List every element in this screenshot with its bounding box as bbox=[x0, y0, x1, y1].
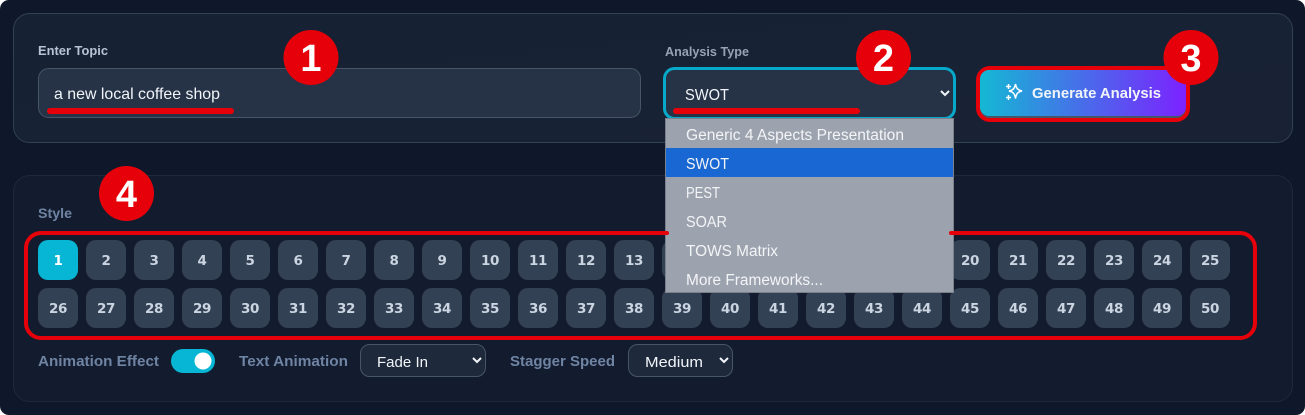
stagger speed select: Medium bbox=[645, 354, 703, 371]
row 2 of style buttons: 31 bbox=[289, 301, 307, 317]
option: generic: Generic 4 Aspects Presentation bbox=[686, 127, 904, 144]
row 2 of style buttons: 48 bbox=[1105, 301, 1123, 317]
row 2 of style buttons bbox=[38, 288, 1230, 328]
row 1 of style buttons: 10 bbox=[481, 253, 499, 269]
row 2 of style buttons: 30 bbox=[241, 301, 259, 317]
icon: sparkles bbox=[1006, 84, 1022, 100]
row 2 of style buttons: 27 bbox=[97, 301, 115, 317]
option: tows matrix: TOWS Matrix bbox=[686, 243, 778, 260]
label: style: Style bbox=[38, 205, 72, 221]
row 2 of style buttons: 34 bbox=[433, 301, 451, 317]
row 1 of style buttons: 5 bbox=[246, 253, 254, 269]
style number grid bbox=[38, 240, 1230, 328]
stagger speed select bbox=[628, 344, 732, 376]
row 1 of style buttons: 21 bbox=[1009, 253, 1027, 269]
badge 2 bbox=[856, 30, 911, 85]
row 2 of style buttons: 38 bbox=[625, 301, 643, 317]
row 1 of style buttons: 25 bbox=[1201, 253, 1219, 269]
analysis type select bbox=[664, 68, 954, 118]
dropdown list bbox=[666, 118, 954, 292]
row 2 of style buttons: 26 bbox=[49, 301, 67, 317]
badge 1 bbox=[284, 30, 338, 85]
row 2 of style buttons: 36 bbox=[529, 301, 547, 317]
row 1 of style buttons: 9 bbox=[438, 253, 446, 269]
row 2 of style buttons: 33 bbox=[385, 301, 403, 317]
option: soar: SOAR bbox=[686, 214, 727, 231]
option: more frameworks: More Frameworks... bbox=[686, 272, 823, 289]
toggle switch bbox=[171, 349, 215, 373]
option: swot: SWOT bbox=[686, 156, 729, 173]
row 2 of style buttons: 49 bbox=[1153, 301, 1171, 317]
row 2 of style buttons: 46 bbox=[1009, 301, 1027, 317]
row 2 of style buttons: 29 bbox=[193, 301, 211, 317]
row 1 of style buttons: 11 bbox=[529, 253, 547, 269]
label: stagger speed: Stagger Speed bbox=[510, 354, 615, 370]
row 1 of style buttons: 12 bbox=[577, 253, 595, 269]
option: pest: PEST bbox=[686, 185, 720, 202]
row 1 of style buttons: 7 bbox=[342, 253, 350, 269]
row 2 of style buttons: 42 bbox=[817, 301, 835, 317]
row 2 of style buttons: 32 bbox=[337, 301, 355, 317]
row 1 of style buttons: 8 bbox=[390, 253, 398, 269]
row 1 of style buttons: 2 bbox=[102, 253, 110, 269]
row 1 of style buttons: 22 bbox=[1057, 253, 1075, 269]
text animation select: Fade In bbox=[377, 354, 428, 371]
badge 2: 2 bbox=[873, 38, 894, 80]
row 1 of style buttons: 4 bbox=[198, 253, 206, 269]
row 1 of style buttons bbox=[38, 240, 1230, 280]
panel: style options bbox=[14, 176, 1292, 402]
row 1 of style buttons: 1 bbox=[54, 253, 62, 269]
badge 3: 3 bbox=[1180, 38, 1202, 80]
underline: topic bbox=[47, 108, 234, 114]
label: analysis type: Analysis Type bbox=[665, 44, 749, 59]
highlight: red frame around style grid bbox=[26, 233, 1255, 338]
row 2 of style buttons: 39 bbox=[673, 301, 691, 317]
analysis type select: SWOT bbox=[685, 87, 729, 104]
panel: topic and analysis form bbox=[14, 14, 1292, 142]
badge 1: 1 bbox=[300, 38, 322, 80]
row 2 of style buttons: 47 bbox=[1057, 301, 1075, 317]
row 1 of style buttons: 13 bbox=[625, 253, 643, 269]
row 2 of style buttons: 44 bbox=[913, 301, 931, 317]
badge 4: 4 bbox=[116, 174, 137, 216]
topic input: a new local coffee shop bbox=[54, 86, 220, 103]
label: animation effect: Animation Effect bbox=[38, 354, 159, 370]
red frame stubs over dropdown edge bbox=[664, 231, 955, 235]
row 1 of style buttons: 23 bbox=[1105, 253, 1123, 269]
row 2 of style buttons: 40 bbox=[721, 301, 739, 317]
row 2 of style buttons: 43 bbox=[865, 301, 883, 317]
row 2 of style buttons: 28 bbox=[145, 301, 163, 317]
generate analysis button bbox=[978, 68, 1188, 120]
row 1 of style buttons: 24 bbox=[1153, 253, 1171, 269]
row 2 of style buttons: 50 bbox=[1201, 301, 1219, 317]
row 2 of style buttons: 35 bbox=[481, 301, 499, 317]
row 2 of style buttons: 45 bbox=[961, 301, 979, 317]
badge 4 bbox=[99, 166, 154, 221]
row 1 of style buttons: 6 bbox=[294, 253, 302, 269]
underline: swot bbox=[673, 108, 860, 114]
text animation select bbox=[360, 344, 486, 376]
row 1 of style buttons: 3 bbox=[150, 253, 158, 269]
topic input bbox=[38, 68, 640, 118]
label: enter topic: Enter Topic bbox=[38, 43, 108, 58]
selected option highlight bbox=[666, 148, 953, 177]
label: text animation: Text Animation bbox=[239, 354, 348, 370]
row 1 of style buttons: 20 bbox=[961, 253, 979, 269]
generate analysis button: Generate Analysis bbox=[1032, 85, 1161, 102]
badge 3 bbox=[1164, 30, 1218, 85]
row 2 of style buttons: 41 bbox=[769, 301, 787, 317]
row 2 of style buttons: 37 bbox=[577, 301, 595, 317]
